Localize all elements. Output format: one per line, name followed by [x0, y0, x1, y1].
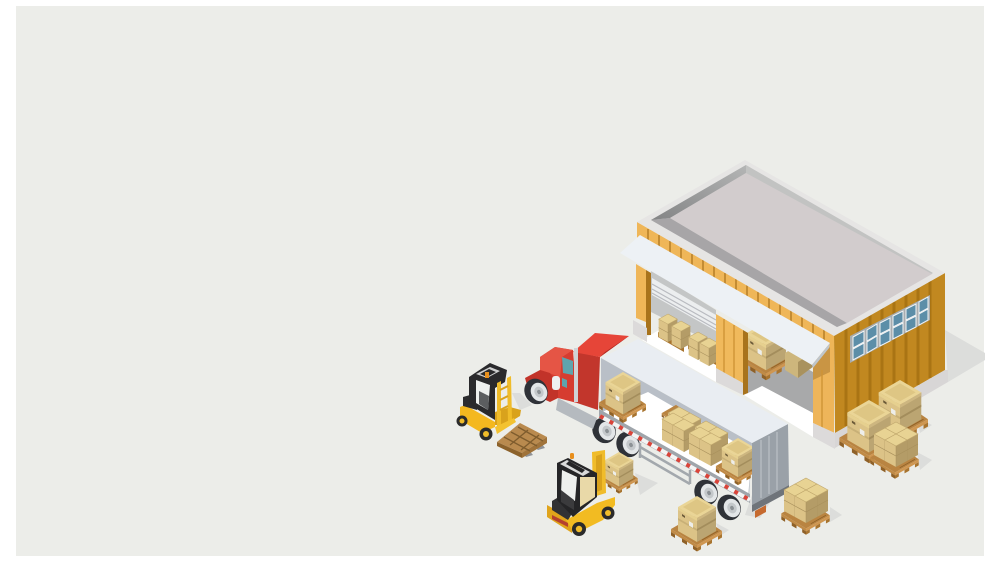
- exhaust stack: [574, 348, 578, 402]
- beacon: [570, 453, 574, 459]
- trailer wheels and chassis: [588, 414, 745, 524]
- cab window: [562, 357, 573, 388]
- stacked crates beside warehouse: [839, 380, 928, 479]
- body: [547, 497, 615, 534]
- wall base plinth: [813, 370, 948, 448]
- fuel tank: [552, 376, 560, 390]
- dark interior of loading bays: [651, 270, 813, 413]
- carton stack on pallet, front right: [781, 478, 830, 535]
- trailer side rail with reflective stripes: [599, 409, 750, 503]
- stored goods inside left bay: [658, 314, 718, 366]
- carried crate: [600, 452, 638, 494]
- window band: [850, 295, 930, 363]
- steel forks: [522, 443, 545, 457]
- crate on trailer front: [599, 372, 646, 423]
- body: [460, 393, 521, 433]
- loading canopy awning: [620, 235, 830, 368]
- black cage: [557, 458, 597, 517]
- wheels: [456, 416, 492, 440]
- ground shadows: [512, 330, 985, 536]
- cab steps: [556, 398, 597, 429]
- crate at trailer rear: [716, 438, 759, 485]
- yellow mast: [495, 376, 516, 434]
- red truck cab: [520, 333, 629, 429]
- front wheel: [520, 375, 552, 408]
- semi-trailer: [588, 339, 789, 524]
- loading dock white floor: [642, 330, 813, 437]
- cartons on trailer: [662, 405, 728, 466]
- flat roof: [637, 160, 945, 336]
- trailer rear door: [752, 424, 789, 518]
- middle pillar: [716, 314, 748, 395]
- stored goods inside right bay: [739, 322, 814, 380]
- wood pallet: [497, 423, 547, 458]
- front wall fascia: [637, 222, 834, 350]
- yellow mast: [592, 450, 606, 497]
- black cage: [469, 363, 507, 420]
- trailer roof: [602, 339, 788, 443]
- roller shutter door: [652, 278, 716, 331]
- right pillar: [813, 340, 835, 449]
- wheels: [572, 506, 614, 536]
- crate on pallet, front: [671, 496, 722, 552]
- forklift carrying crate: [547, 450, 638, 536]
- cab side and fairing: [573, 333, 629, 410]
- forklift with empty pallet: [456, 363, 547, 458]
- left pillar: [633, 264, 651, 342]
- trailer interior: [601, 358, 752, 500]
- hood and body: [525, 347, 577, 403]
- right side wall: [834, 273, 945, 433]
- warehouse building: [620, 160, 948, 449]
